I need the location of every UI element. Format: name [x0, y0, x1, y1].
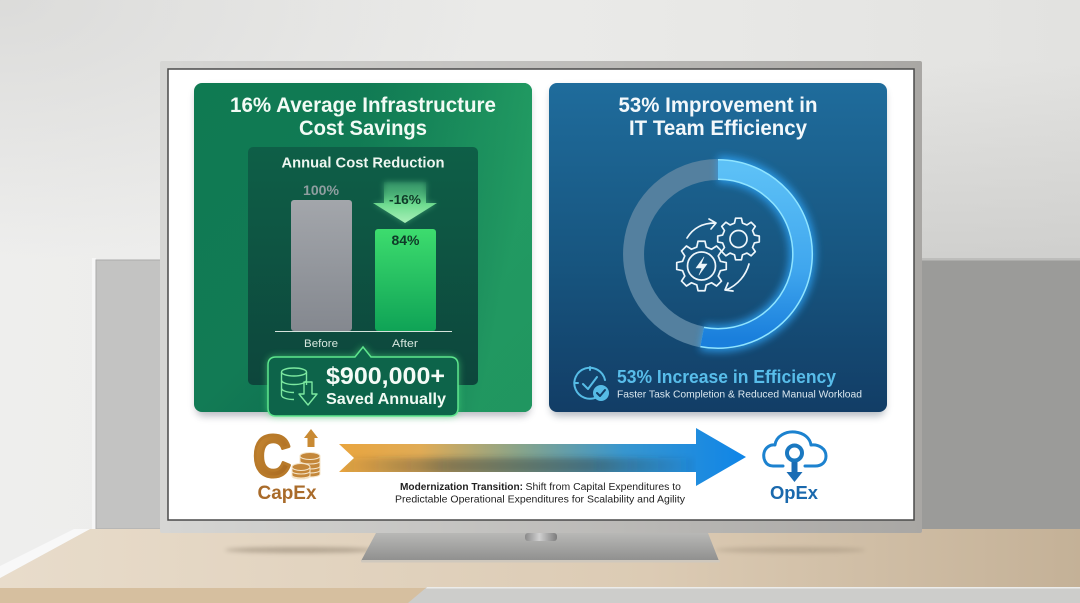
- transition description: Predictable Operational Expenditures for Scalability and Agility: [395, 494, 685, 506]
- amount: $900,000+: [326, 363, 445, 390]
- icon: clock with check badge: [574, 367, 609, 401]
- CapEx icon and label: [253, 424, 320, 504]
- arrow: CapEx to OpEx transition: [339, 428, 746, 486]
- arrow: minus 16 percent: [373, 182, 437, 223]
- OpEx icon and label: [764, 432, 826, 503]
- bar: after: [375, 229, 436, 331]
- icon: gears with arrows: [677, 218, 759, 291]
- icon: coins stack with down arrow: [282, 368, 317, 405]
- heading: cost savings: Cost Savings: [299, 117, 427, 140]
- arrow: minus 16 percent: -16%: [389, 192, 421, 207]
- donut chart: 53 percent: [634, 169, 803, 338]
- heading: efficiency: 53% Improvement in: [618, 94, 818, 117]
- panel: infrastructure cost savings: [194, 83, 532, 416]
- amount caption: Saved Annually: [326, 391, 446, 408]
- efficiency caption: Faster Task Completion & Reduced Manual Workload: [617, 388, 862, 400]
- axis label: after: After: [392, 338, 418, 350]
- transition description: Shift from Capital Expenditures to: [526, 482, 681, 493]
- bar: after: 84%: [392, 233, 420, 248]
- icon: cloud with download arrow: [764, 432, 826, 482]
- bar chart: annual cost reduction: [248, 147, 478, 385]
- icon: letter C with coins: C: [253, 424, 291, 490]
- OpEx label: OpEx: [770, 482, 819, 503]
- monitor stand: [361, 533, 720, 562]
- heading: cost savings: 16% Average Infrastructure: [230, 94, 496, 117]
- callout: saved annually: [268, 347, 458, 416]
- heading: efficiency: IT Team Efficiency: [629, 117, 807, 140]
- panel: IT team efficiency: [549, 83, 887, 416]
- monitor bezel: [160, 61, 922, 533]
- CapEx label: CapEx: [258, 483, 317, 504]
- bar: before: [291, 183, 352, 331]
- efficiency stat: 53% Increase in Efficiency: [617, 367, 836, 387]
- axis label: before: Before: [304, 338, 338, 350]
- transition description: Modernization Transition:: [400, 482, 523, 493]
- chart title: Annual Cost Reduction: [282, 156, 444, 172]
- bar: before: 100%: [303, 183, 339, 198]
